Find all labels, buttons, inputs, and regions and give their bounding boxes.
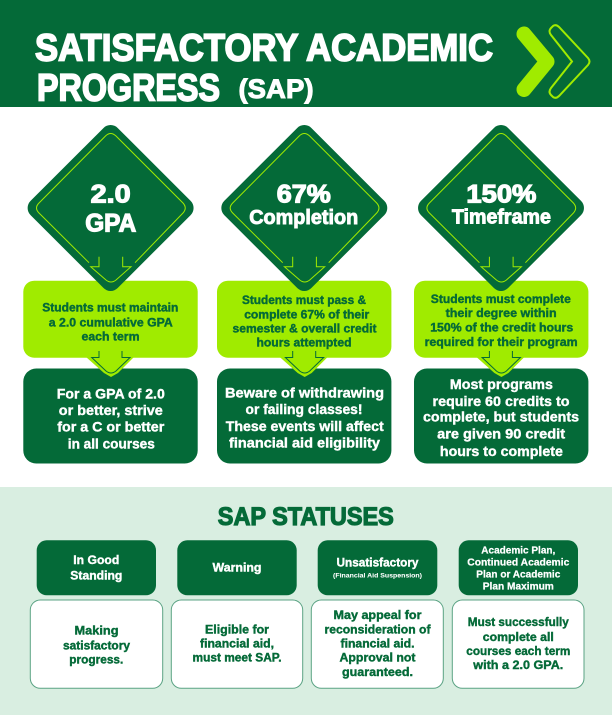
dark detail box	[414, 368, 588, 464]
status: Warning: financial aid,	[200, 637, 274, 651]
requirement text: Students must maintain	[42, 303, 178, 315]
status: In Good Standing: Making	[74, 623, 118, 637]
status: Academic Plan: Academic Plan,	[481, 544, 555, 556]
detail text	[57, 385, 165, 451]
status: Unsatisfactory	[311, 540, 443, 688]
diamond	[23, 121, 198, 295]
detail text: These events will affect	[226, 418, 384, 434]
heading: SAP STATUSES	[218, 503, 394, 531]
requirement text: Students must complete	[431, 294, 571, 306]
requirement text: each term	[82, 332, 140, 344]
detail text: in all courses	[68, 435, 155, 451]
dark detail box	[217, 368, 391, 464]
detail text: for a C or better	[57, 419, 165, 435]
status: Unsatisfactory: reconsideration of	[324, 622, 432, 636]
diamond: Timeframe	[452, 206, 551, 228]
detail text: are given 90 credit	[437, 425, 565, 441]
diamond: Completion	[249, 207, 358, 229]
detail text: hours to complete	[440, 443, 563, 459]
lime requirement box	[23, 281, 198, 377]
status: Academic Plan: complete all	[483, 630, 554, 644]
diamond: 67%	[277, 181, 331, 209]
status: Warning	[171, 540, 303, 688]
title: SATISFACTORY ACADEMIC	[35, 28, 493, 70]
status: Unsatisfactory: Unsatisfactory	[336, 556, 419, 570]
status: In Good Standing: In Good	[73, 553, 119, 567]
column: 67% Completion	[217, 121, 391, 464]
requirement text: a 2.0 cumulative GPA	[49, 318, 173, 330]
requirement text	[425, 294, 578, 349]
detail text: or failing classes!	[246, 401, 362, 417]
diamond: 150%	[466, 181, 536, 209]
requirement text: hours attempted	[256, 338, 352, 350]
status: Academic Plan: with a 2.0 GPA.	[472, 658, 563, 672]
column: 2.0 GPA	[23, 121, 198, 464]
status: Academic Plan: courses each term	[466, 644, 570, 658]
title: (SAP)	[238, 74, 314, 104]
status: In Good Standing: satisfactory	[63, 638, 130, 652]
title	[35, 28, 493, 110]
detail text: or better, strive	[59, 402, 163, 418]
diamond	[414, 121, 588, 295]
status: In Good Standing	[30, 540, 163, 688]
detail text: financial aid eligibility	[229, 435, 380, 451]
detail text: Most programs	[450, 376, 553, 392]
status: Unsatisfactory: Approval not	[340, 651, 416, 665]
status: Warning: Warning	[212, 561, 262, 575]
header band	[0, 0, 612, 110]
requirement text: Students must pass &	[242, 295, 366, 307]
lime requirement box	[414, 281, 588, 377]
dark detail box	[23, 368, 198, 464]
status: Academic Plan: Plan Maximum	[483, 580, 554, 592]
diamond: 2.0	[91, 181, 131, 209]
lime requirement box	[217, 281, 391, 377]
column: 150% Timeframe	[414, 121, 588, 464]
status: Academic Plan	[452, 540, 584, 688]
status: Unsatisfactory: (Financial Aid Suspension)	[333, 572, 422, 579]
requirement text: their degree within	[446, 308, 557, 320]
requirement text: complete 67% of their	[244, 309, 370, 321]
diamond: GPA	[85, 210, 136, 238]
status: Academic Plan: Plan or Academic	[476, 568, 560, 580]
status: Warning: must meet SAP.	[192, 651, 282, 665]
status: Academic Plan: Continued Academic	[467, 556, 569, 568]
detail text	[225, 384, 384, 451]
status: Academic Plan: Must successfully	[468, 615, 569, 629]
status: Warning: Eligible for	[205, 622, 269, 636]
detail text: complete, but students	[423, 409, 579, 425]
status: In Good Standing: progress.	[69, 652, 123, 666]
requirement text: required for their program	[425, 337, 578, 349]
title: PROGRESS	[37, 68, 220, 110]
detail text: Beware of withdrawing	[225, 384, 384, 400]
panel: SAP statuses	[0, 487, 612, 715]
requirement text: semester & overall credit	[232, 324, 377, 336]
requirement text	[42, 303, 178, 344]
status: Unsatisfactory: guaranteed.	[342, 665, 413, 679]
diamond	[217, 121, 391, 295]
detail text	[423, 376, 579, 459]
status: Unsatisfactory: May appeal for	[334, 608, 422, 622]
status: Unsatisfactory: financial aid.	[340, 637, 414, 651]
detail text: For a GPA of 2.0	[57, 385, 165, 401]
status: In Good Standing: Standing	[70, 568, 122, 582]
requirement text: 150% of the credit hours	[430, 323, 573, 335]
requirement text	[232, 295, 377, 350]
icon: double chevron	[524, 25, 590, 98]
detail text: require 60 credits to	[432, 393, 569, 409]
